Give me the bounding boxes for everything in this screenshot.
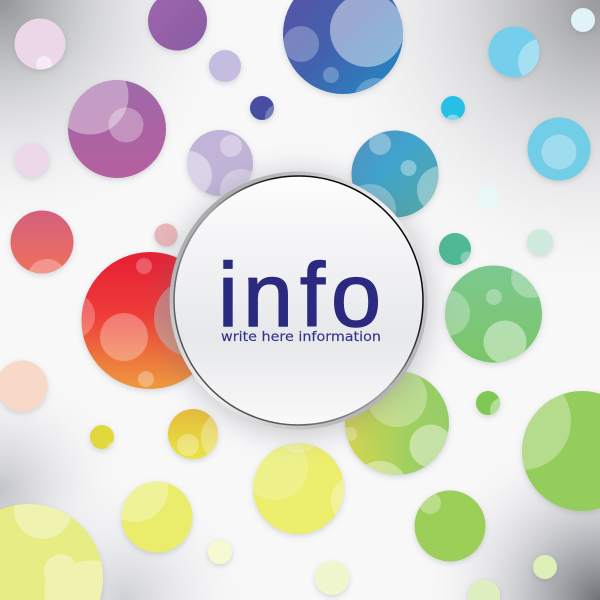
subtitle: write here information: write here information bbox=[221, 329, 381, 345]
bubble: small green bbox=[474, 391, 502, 419]
bubble: big red orange bbox=[79, 252, 194, 393]
bubble: peach bbox=[0, 360, 48, 412]
bubble: tiny yellow bbox=[90, 425, 117, 452]
bubble: pale cyan corner bbox=[571, 8, 595, 32]
bubble: very pale aqua bbox=[476, 186, 500, 208]
bubble: amber yellow bbox=[166, 409, 220, 463]
bubble: small rose bbox=[154, 224, 178, 246]
bubble: cyan small bbox=[441, 96, 465, 130]
bubble: large magenta bbox=[66, 80, 168, 182]
bubble: yellow green under disc bbox=[343, 372, 451, 480]
bubble: pale green bottom edge bbox=[468, 580, 500, 600]
main disc shadow bbox=[169, 174, 429, 434]
bubble: small teal bbox=[439, 233, 474, 265]
bubble: pale yellow small bbox=[208, 540, 232, 564]
bubble: purple top bbox=[148, 0, 207, 50]
bubble: teal green bbox=[443, 266, 544, 367]
bubble: lavender small bbox=[209, 50, 241, 82]
bubble: cyan top right bbox=[487, 26, 540, 81]
bubble: yellow lower left bbox=[120, 482, 194, 556]
bubble: coral left bbox=[8, 210, 76, 278]
bubble: green bottom bbox=[414, 490, 486, 562]
bubble: pale pink top left bbox=[14, 18, 66, 72]
bubble: big yellow bottom left bbox=[0, 504, 104, 600]
bubble: pale green small bbox=[533, 555, 557, 579]
bubble: pale mint bbox=[527, 229, 553, 255]
bubble: cyan with inner circle bbox=[528, 118, 590, 180]
bubble: blue teal bbox=[350, 130, 440, 221]
bubble: pale yellow bottom bbox=[315, 561, 349, 595]
main info disc bbox=[170, 172, 428, 430]
bubble: large yellow centre bbox=[251, 443, 346, 538]
title: info: info bbox=[218, 246, 381, 346]
bubble: pale pink left bbox=[15, 143, 49, 177]
bubble: large green right bbox=[520, 391, 600, 514]
bubble: big blue top bbox=[281, 0, 405, 98]
bubble: lavender behind disc bbox=[185, 130, 255, 200]
bubble: navy small bbox=[248, 96, 276, 124]
